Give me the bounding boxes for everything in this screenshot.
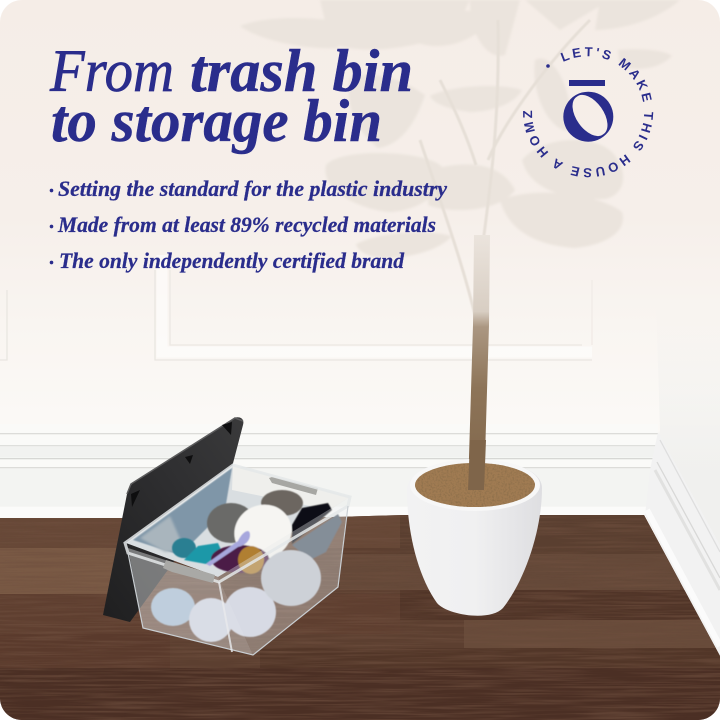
bin latch back (269, 477, 318, 495)
crochet hook (206, 531, 250, 566)
wood floor (0, 512, 720, 720)
yarn: pale (261, 550, 321, 606)
white plant pot (407, 440, 542, 616)
bullet: certified brand: The only independently certified brand (59, 248, 405, 273)
yarn: purple and gold (211, 545, 269, 574)
pot rim highlight (426, 459, 540, 510)
title: to storage bin (51, 88, 382, 154)
background wall (0, 0, 720, 538)
logo macron (569, 80, 605, 86)
baseboard (0, 433, 658, 468)
right baseboard (645, 432, 720, 660)
right side wall (662, 438, 720, 544)
bin interior (126, 466, 312, 577)
title: trash bin (190, 38, 413, 104)
bullet: plastic industry: Setting the standard for the plastic industry (58, 176, 447, 201)
wainscot wall panel (0, 255, 592, 360)
bin faces (128, 548, 253, 655)
plastic storage bin (125, 465, 350, 655)
circular slogan: LET'S MAKE THIS HOUSE A HOMZ (523, 47, 654, 178)
plant foliage (240, 0, 680, 258)
title (49, 38, 413, 154)
plastic storage bin lid (103, 417, 243, 622)
potting soil (415, 463, 535, 507)
yarn: light blue (151, 588, 195, 626)
yarn: lavender large (224, 587, 276, 637)
bullet list (50, 176, 447, 273)
plant branches (420, 20, 590, 320)
yarn: black (292, 503, 332, 544)
yarn: dark navy in bin (292, 514, 342, 560)
yarn: taupe (261, 490, 303, 516)
bin back wall (232, 465, 350, 510)
bin rim (125, 465, 350, 582)
plant trunk (468, 235, 490, 460)
yarn: white (234, 504, 293, 559)
logo badge (523, 47, 654, 178)
bin left inner wall (133, 468, 232, 555)
yarn: gray (207, 503, 255, 543)
title: From (49, 38, 174, 104)
yarn: lavender (189, 598, 233, 642)
yarn: dark teal (172, 538, 196, 558)
bullet: recycled materials: Made from at least 89% recycled materials (57, 212, 436, 237)
bin latch front (163, 560, 215, 583)
yarn: bright teal (184, 543, 222, 564)
trunk base (468, 440, 486, 490)
logo letter o (563, 92, 613, 142)
